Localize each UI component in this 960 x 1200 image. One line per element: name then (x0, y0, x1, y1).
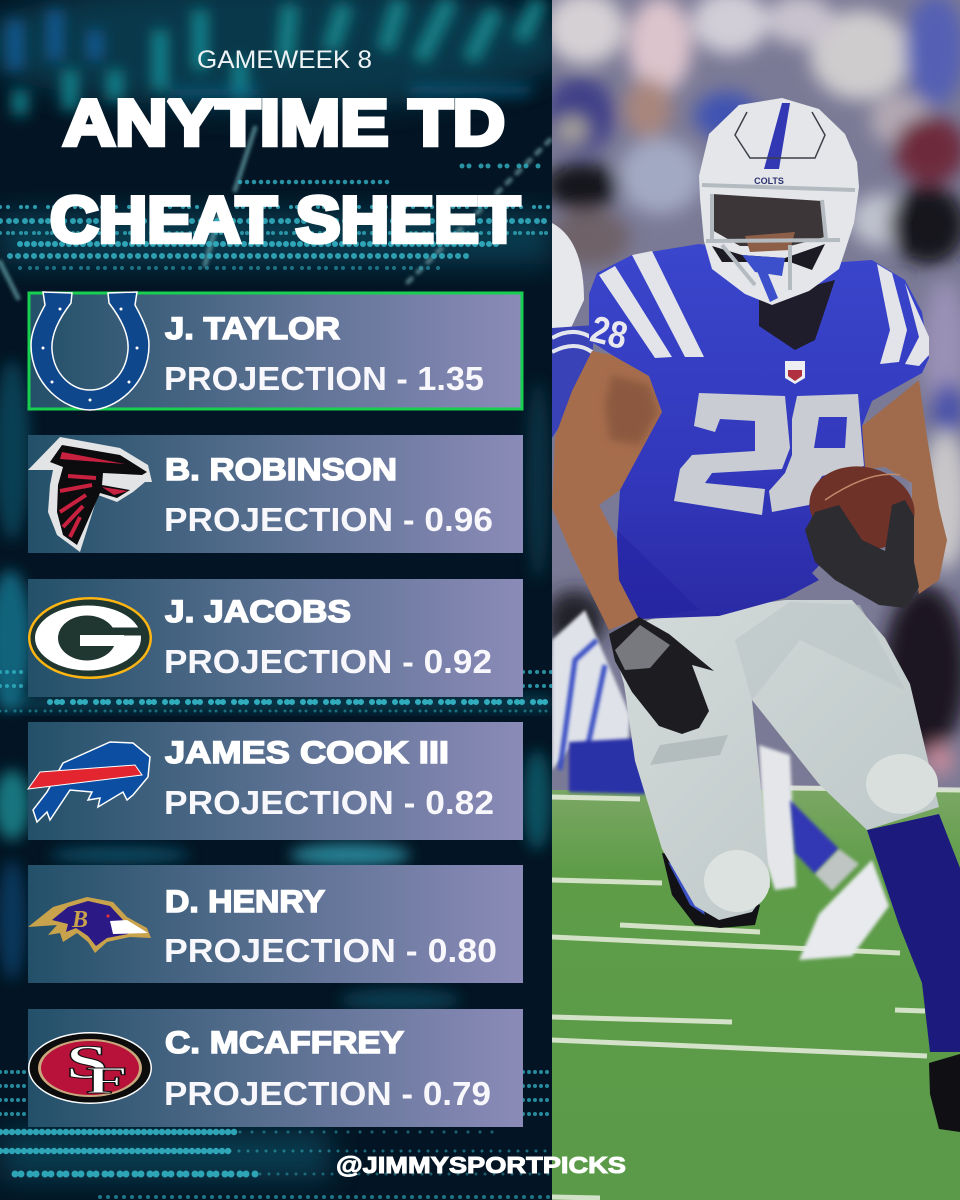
title: gameweek: GAMEWEEK 8 (197, 46, 372, 74)
lower leg (867, 814, 960, 1052)
card: J. Jacobs (28, 579, 523, 697)
card: J. Taylor (29, 292, 522, 410)
card: James Cook III: PROJECTION - 0.82 (164, 784, 494, 821)
card: D. Henry: PROJECTION - 0.80 (164, 932, 497, 969)
helmet (699, 98, 859, 305)
ball (809, 466, 914, 548)
left arm (552, 351, 662, 630)
chest number (674, 393, 864, 515)
icon: Packers (28, 597, 152, 679)
card: C. McAffrey: PROJECTION - 0.79 (164, 1075, 491, 1112)
knee pads (866, 754, 938, 814)
jersey sleeve stripes (599, 251, 929, 366)
jersey (589, 244, 929, 619)
ball glove (805, 500, 919, 608)
card: B. Robinson: B. ROBINSON (165, 451, 397, 487)
icon: 49ers: F (86, 1060, 128, 1102)
card: D. Henry (28, 865, 523, 983)
icon: Ravens (28, 897, 151, 953)
title: cheat sheet: CHEAT SHEET (50, 183, 520, 256)
title: anytime td: ANYTIME TD (63, 86, 505, 159)
card: J. Taylor: PROJECTION - 1.35 (164, 360, 484, 397)
card: James Cook III (28, 722, 523, 840)
rear foot (662, 853, 760, 928)
card: James Cook III: JAMES COOK III (165, 734, 449, 770)
card: J. Jacobs: J. JACOBS (165, 593, 351, 629)
icon: Falcons (28, 437, 152, 552)
panel: data-pattern background (0, 0, 570, 1200)
pants (609, 600, 939, 920)
icon: 49ers: S (66, 1036, 108, 1089)
card: C. McAffrey: C. MCAFFREY (165, 1024, 404, 1060)
card: B. Robinson (28, 435, 523, 553)
icon: Bills (28, 742, 150, 822)
Ravens B: B (71, 907, 88, 933)
free glove (609, 617, 714, 734)
card: B. Robinson: PROJECTION - 0.96 (164, 501, 493, 538)
panel: player photo (544, 0, 960, 1200)
cleat (929, 1054, 960, 1132)
card: C. McAffrey (28, 1009, 523, 1127)
footer handle: @JIMMYSPORTPICKS (336, 1152, 626, 1178)
card: J. Taylor: J. TAYLOR (165, 310, 340, 346)
card: D. Henry: D. HENRY (165, 883, 325, 919)
player (552, 98, 960, 1132)
right arm (862, 380, 947, 594)
icon: Colts horseshoe (31, 292, 149, 410)
background players (552, 223, 889, 960)
card: J. Jacobs: PROJECTION - 0.92 (164, 643, 492, 680)
NFL shield (785, 361, 805, 384)
field (552, 788, 960, 1200)
helmet label: COLTS (754, 176, 784, 186)
neck (759, 280, 835, 350)
icon: 49ers (28, 1032, 152, 1104)
sleeve number: 28 (586, 309, 631, 358)
crowd background (544, 0, 960, 800)
